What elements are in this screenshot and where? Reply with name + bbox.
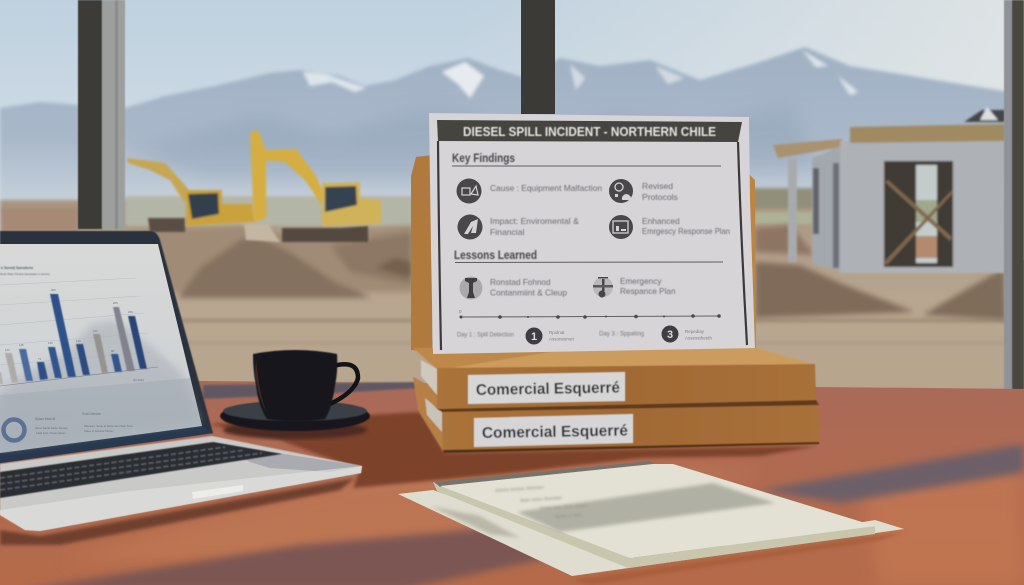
icon: equipment [456,178,482,204]
dashboard cards: Sttsnesn. Sane st Stsne Sen Stan Snst [84,424,133,428]
saucer [220,401,370,431]
lesson: response plan: Emergency [620,277,662,286]
icon: excavator arm [458,214,482,240]
chart labels: 210 [93,329,98,333]
door braces [885,180,952,241]
lower binder bottom edge [443,442,819,453]
table shadow band: bottom [20,525,610,585]
table shadow band: back [203,382,420,399]
window pillar: right [1004,0,1024,390]
screen heading: k Ssnot| Sanstions [1,266,33,270]
upper binder top [413,347,815,369]
sky [0,0,1024,260]
donut chart [4,420,24,440]
lesson: response plan: Respance Plan [620,287,676,296]
front wall [840,141,1005,273]
chart labels: 300 [51,288,56,292]
side wall [812,142,850,273]
timeline step: 1 [526,328,575,344]
dashboard cards: Sont Dehstre [82,412,101,416]
excavator: left [127,158,254,232]
timeline step: 3 [662,326,713,342]
chart labels: 115 [19,343,24,347]
screen heading: Rustr Ratw Titruhst Apsrstalen e tohnsts [0,272,50,276]
cup handle [330,364,358,404]
coffee cup and saucer [220,350,370,439]
cup body [253,350,337,422]
porch column [788,158,797,262]
chart axis [0,367,158,386]
chart labels: 140 [76,339,81,343]
window pillar: left [78,0,125,229]
bar chart [0,294,147,384]
lesson: response plan [593,277,676,298]
chart labels: Q3 2024 [133,378,144,382]
timeline step: day 3: Day 3 : Sppating [599,330,645,338]
building under construction [773,107,1005,273]
finding: cause: Cause : Equipment Malfaction [490,183,602,193]
table shadow band: right [760,444,1024,503]
dashboard cards: Stsno Sanst Setse Sunstg [35,426,68,430]
finding: revised protocols [609,179,678,203]
chart labels [5,288,144,382]
paper sheet [429,113,755,354]
icon: valve [593,277,613,298]
roof beam [850,124,1005,143]
finding: emergency plan: Emrgescy Response Plan [642,226,730,236]
screen shadow [0,320,200,450]
lower binder front [442,405,819,451]
dashboard cards [33,408,133,435]
sheet text: Sstsne stnstsn Ststnsen [495,485,544,493]
sheet text: Stnse st Stsn [555,512,583,519]
timeline step: 1: Assonesmet [549,336,575,342]
lesson: containment: Ronstad Fohnod [490,278,551,287]
timeline step: 3: Repediay [685,329,705,334]
sheet text [495,485,589,519]
finding: impact [458,214,579,240]
dashboard cards: Fstal sant, Sstns stosen [36,431,66,435]
label: upper binder: Comercial Esquerré [476,379,620,399]
top sheet edge [433,482,875,568]
dashboard cards: Spacs Intas Al [35,417,55,421]
timeline step: 3: Assesstheeth [685,336,713,340]
label: upper binder [468,372,625,404]
rooftop object [964,110,1005,122]
finding: revised protocols: Protocols [642,192,678,202]
heading: key findings: Key Findings [452,153,515,165]
lower binder pages [425,398,442,432]
excavator: right [244,130,381,242]
screen heading [0,266,50,276]
title bar: DIESEL SPILL INCIDENT - NORTHERN CHILE [463,125,716,139]
sheet shadow band [517,483,775,532]
table wood grain and sun [60,470,1024,585]
sheet text: Sntse sten Stste stnsen [540,503,589,511]
documents on table [398,461,906,585]
chart labels: 86 [111,349,115,353]
finding: cause [456,178,602,204]
timeline step: 1: 1 [531,331,537,343]
laptop notch [192,485,243,499]
timeline step: day 1: Day 1 : Spill Detection [457,332,515,338]
finding: revised protocols: Revised [642,181,673,191]
lesson: containment [460,276,567,300]
laptop lid [0,231,213,463]
stacked binders [413,347,819,453]
timeline: 0 [459,309,462,314]
grid lines [0,278,152,365]
laptop front edge [0,466,362,531]
finding: impact: Impact: Enviromental & [490,216,579,226]
label: lower binder: Comercial Esquerré [482,422,628,442]
excavators [127,130,381,242]
laptop keyboard [0,442,282,498]
door opening [916,165,937,263]
heading: lessons learned: Lessons Learned [454,250,537,262]
laptop screen [0,244,202,453]
icon: magnifier [609,179,633,203]
upper binder flap [413,376,437,409]
folder behind paper [411,155,756,352]
table [0,380,1024,585]
upper binder pages [421,360,437,395]
title bar [437,120,742,142]
label: lower binder [474,414,633,447]
icon: response plan board [609,215,633,239]
laptop base [0,436,362,531]
finding: emergency plan [609,215,730,239]
chart labels: 71 [38,357,42,361]
chart labels: 230 [128,310,133,314]
sheet shadow band: base [430,506,520,538]
saucer shadow [223,421,367,439]
construction ground [0,188,1010,400]
window pillar: center [521,0,555,114]
dirt mounds [125,225,1006,320]
porch roof [773,139,842,158]
sheet text: Ststn sntsn Stansten [520,495,563,503]
incident report paper [429,113,755,354]
base sheet [398,490,904,576]
finding: emergency plan: Enhanced [642,216,680,226]
laptop side panel [213,442,362,472]
lesson: containment: Contanmiint & Cleup [490,288,567,298]
paper side rules [438,141,441,350]
top sheet binding [434,461,654,487]
document shadow [573,532,906,585]
upper binder front [437,364,816,409]
lower binder cover [413,377,819,451]
laptop [0,231,362,531]
top sheet [440,464,875,558]
timeline [459,309,721,319]
mountains [0,47,1010,215]
timeline step: 3: 3 [667,329,673,341]
finding: impact: Financial [490,227,524,237]
timeline step: 1: Rpidnat [549,330,565,335]
door frame [884,161,953,267]
chart labels: 145 [48,341,53,345]
chart labels: 120 [5,348,10,352]
table shadow: laptop and books [208,412,817,488]
mountain ridge shading [130,105,820,180]
icon: containment [460,276,482,300]
chart labels: 265 [113,301,118,305]
table shadow: under laptop [0,478,355,545]
dashboard cards: Sntse st Snstsnt Stosen [84,429,114,433]
